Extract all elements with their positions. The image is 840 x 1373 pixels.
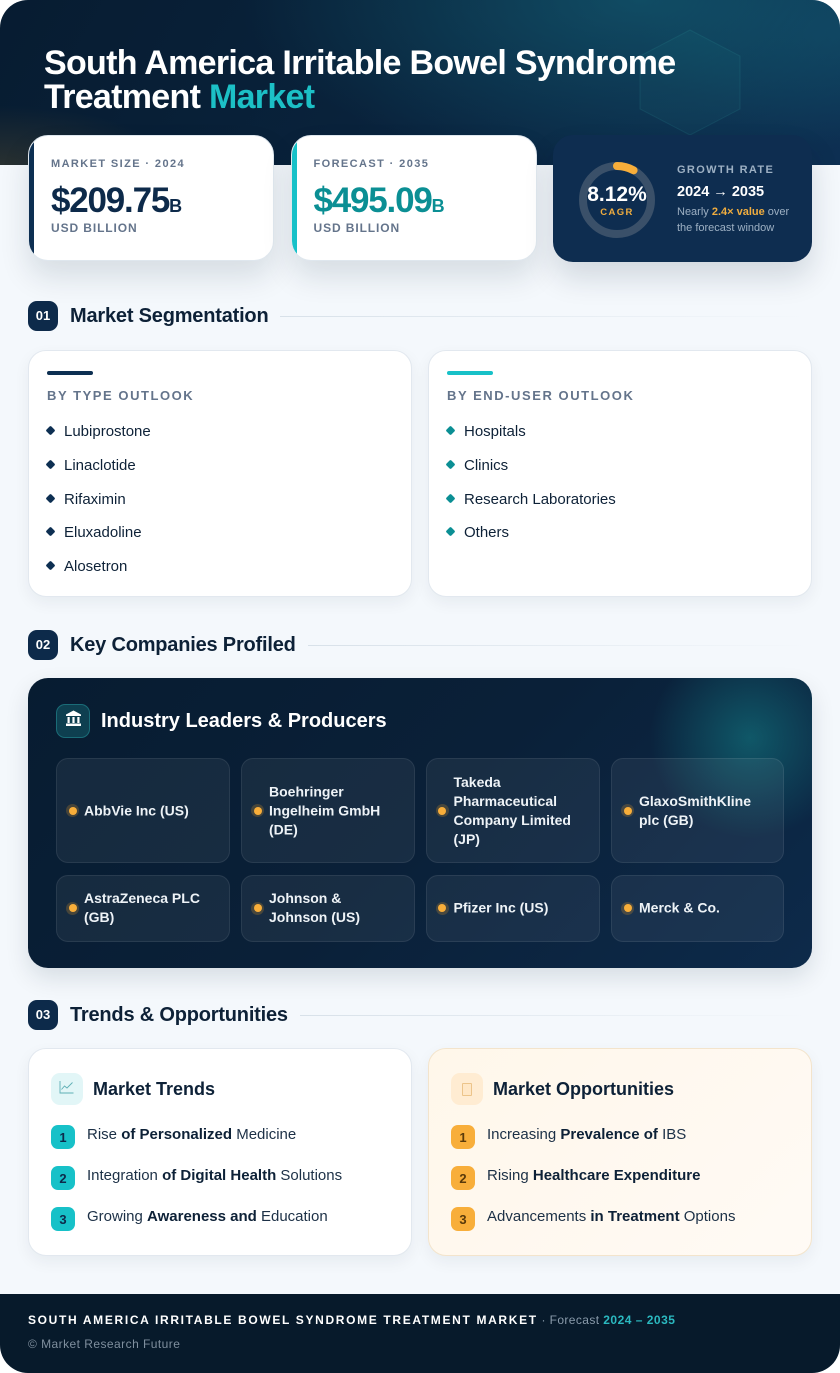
- section heading: trends and opportunities: Trends & Opportunities: [70, 1004, 288, 1026]
- company: Boehringer: [241, 758, 415, 863]
- company: Takeda: Takeda Pharmaceutical Company Limited (JP): [454, 774, 571, 846]
- panel: market trends: 2: [59, 1171, 67, 1186]
- copyright: © Market Research Future: [28, 1337, 180, 1351]
- footer title line: SOUTH AMERICA IRRITABLE BOWEL SYNDROME TREATMENT MARKET · Forecast 2024 – 2035: [28, 1313, 675, 1327]
- section heading: market segmentation: 01: [36, 308, 50, 323]
- company: Takeda: [426, 758, 600, 863]
- panel: market opportunities: 3: [459, 1212, 467, 1227]
- panel: by type outlook: Eluxadoline: [64, 524, 142, 540]
- panel: by end-user outlook: Research Laboratories: [464, 490, 616, 508]
- company: Merck: Merck & Co.: [639, 900, 720, 916]
- icon: institution: [56, 704, 90, 738]
- footer: [0, 1294, 840, 1373]
- panel: by end-user outlook: Hospitals: [464, 422, 526, 440]
- panel heading: Industry Leaders & Producers: [101, 710, 387, 732]
- panel: market opportunities: 2: [459, 1171, 467, 1186]
- hero banner background: [0, 0, 840, 165]
- KPI card: market size 2024: USD BILLION: [51, 221, 138, 235]
- section heading: trends and opportunities: 03: [36, 1007, 50, 1022]
- company: Pfizer: Pfizer Inc (US): [454, 900, 548, 916]
- company: GlaxoSmithKline: [611, 758, 784, 863]
- panel: by end-user outlook: Clinics: [464, 456, 508, 474]
- growth rate text: Nearly 2.4× value over: [677, 206, 789, 218]
- panel: market trends: Market Trends: [93, 1079, 215, 1099]
- panel: market opportunities: Advancements in Treatment Options: [487, 1208, 735, 1225]
- company: Pfizer: [426, 874, 600, 942]
- KPI card: market size 2024: [28, 135, 274, 261]
- panel: by type outlook: Lubiprostone: [64, 422, 151, 440]
- panel: by type outlook: Rifaximin: [64, 490, 126, 508]
- growth rate text: the forecast window: [677, 222, 774, 234]
- panel: market trends: Integration of Digital Health Solutions: [87, 1167, 342, 1184]
- company: AstraZeneca: [56, 874, 230, 942]
- panel: market opportunities: Increasing Prevalence of IBS: [487, 1126, 686, 1143]
- panel: by type outlook: Alosetron: [64, 558, 127, 574]
- panel: industry leaders: [28, 678, 812, 968]
- section heading: trends and opportunities: [28, 1000, 666, 1030]
- growth rate text: GROWTH RATE: [677, 164, 774, 176]
- section heading: market segmentation: [28, 301, 660, 331]
- decorative hexagon: [640, 30, 740, 135]
- panel: market opportunities: 1: [459, 1130, 467, 1145]
- company: Merck: [611, 874, 784, 942]
- KPI card: forecast 2035: FORECAST · 2035: [314, 158, 429, 170]
- company: GlaxoSmithKline: GlaxoSmithKline plc (GB): [639, 792, 751, 828]
- panel: market opportunities: [428, 1048, 812, 1256]
- title: Treatment Market: [44, 78, 314, 116]
- title: South America Irritable Bowel Syndrome: [44, 44, 676, 82]
- panel: by end-user outlook: Others: [464, 524, 509, 540]
- company: AbbVie: [56, 758, 230, 863]
- section heading: key companies: Key Companies Profiled: [70, 634, 296, 656]
- panel: market trends: Growing Awareness and Education: [87, 1208, 328, 1225]
- company: Johnson & Johnson: [241, 874, 415, 942]
- CAGR ring chart: 8.12%: [587, 183, 647, 206]
- company: Johnson & Johnson: Johnson & Johnson (US): [269, 890, 360, 925]
- section heading: key companies: 02: [36, 637, 50, 652]
- company: AstraZeneca: AstraZeneca PLC (GB): [84, 890, 200, 925]
- section heading: market segmentation: Market Segmentation: [70, 305, 268, 327]
- KPI card: forecast 2035: [291, 135, 537, 261]
- title: [44, 44, 676, 116]
- KPI card: forecast 2035: USD BILLION: [314, 221, 400, 235]
- icon: chart: [51, 1073, 83, 1105]
- KPI card: growth rate: [553, 135, 812, 262]
- panel: market trends: Rise of Personalized Medicine: [87, 1126, 296, 1143]
- panel: by end-user outlook: BY END-USER OUTLOOK: [447, 388, 634, 403]
- KPI card: market size 2024: $209.75B: [51, 181, 182, 220]
- KPI card: forecast 2035: $495.09B: [314, 181, 445, 220]
- panel: by type outlook: Linaclotide: [64, 456, 136, 474]
- panel: by end-user outlook: [428, 350, 812, 597]
- panel: by type outlook: [28, 350, 412, 597]
- panel: market trends: 3: [59, 1212, 67, 1227]
- panel: market opportunities: Market Opportunities: [493, 1079, 674, 1099]
- CAGR ring chart: [579, 162, 655, 238]
- CAGR ring chart: CAGR: [600, 207, 634, 218]
- panel: market opportunities: Rising Healthcare Expenditure: [487, 1167, 700, 1184]
- icon: opportunity glyph box: [451, 1073, 483, 1105]
- panel: market trends: [28, 1048, 412, 1256]
- growth rate text: [677, 164, 789, 234]
- section heading: key companies: [28, 630, 668, 660]
- panel: by type outlook: BY TYPE OUTLOOK: [47, 388, 194, 403]
- KPI card: market size 2024: MARKET SIZE · 2024: [51, 158, 185, 170]
- company: AbbVie: AbbVie Inc (US): [84, 802, 189, 818]
- panel: market trends: 1: [59, 1130, 67, 1145]
- company: Boehringer: Boehringer Ingelheim GmbH (DE): [269, 783, 380, 837]
- growth rate text: 2024 → 2035: [677, 184, 764, 200]
